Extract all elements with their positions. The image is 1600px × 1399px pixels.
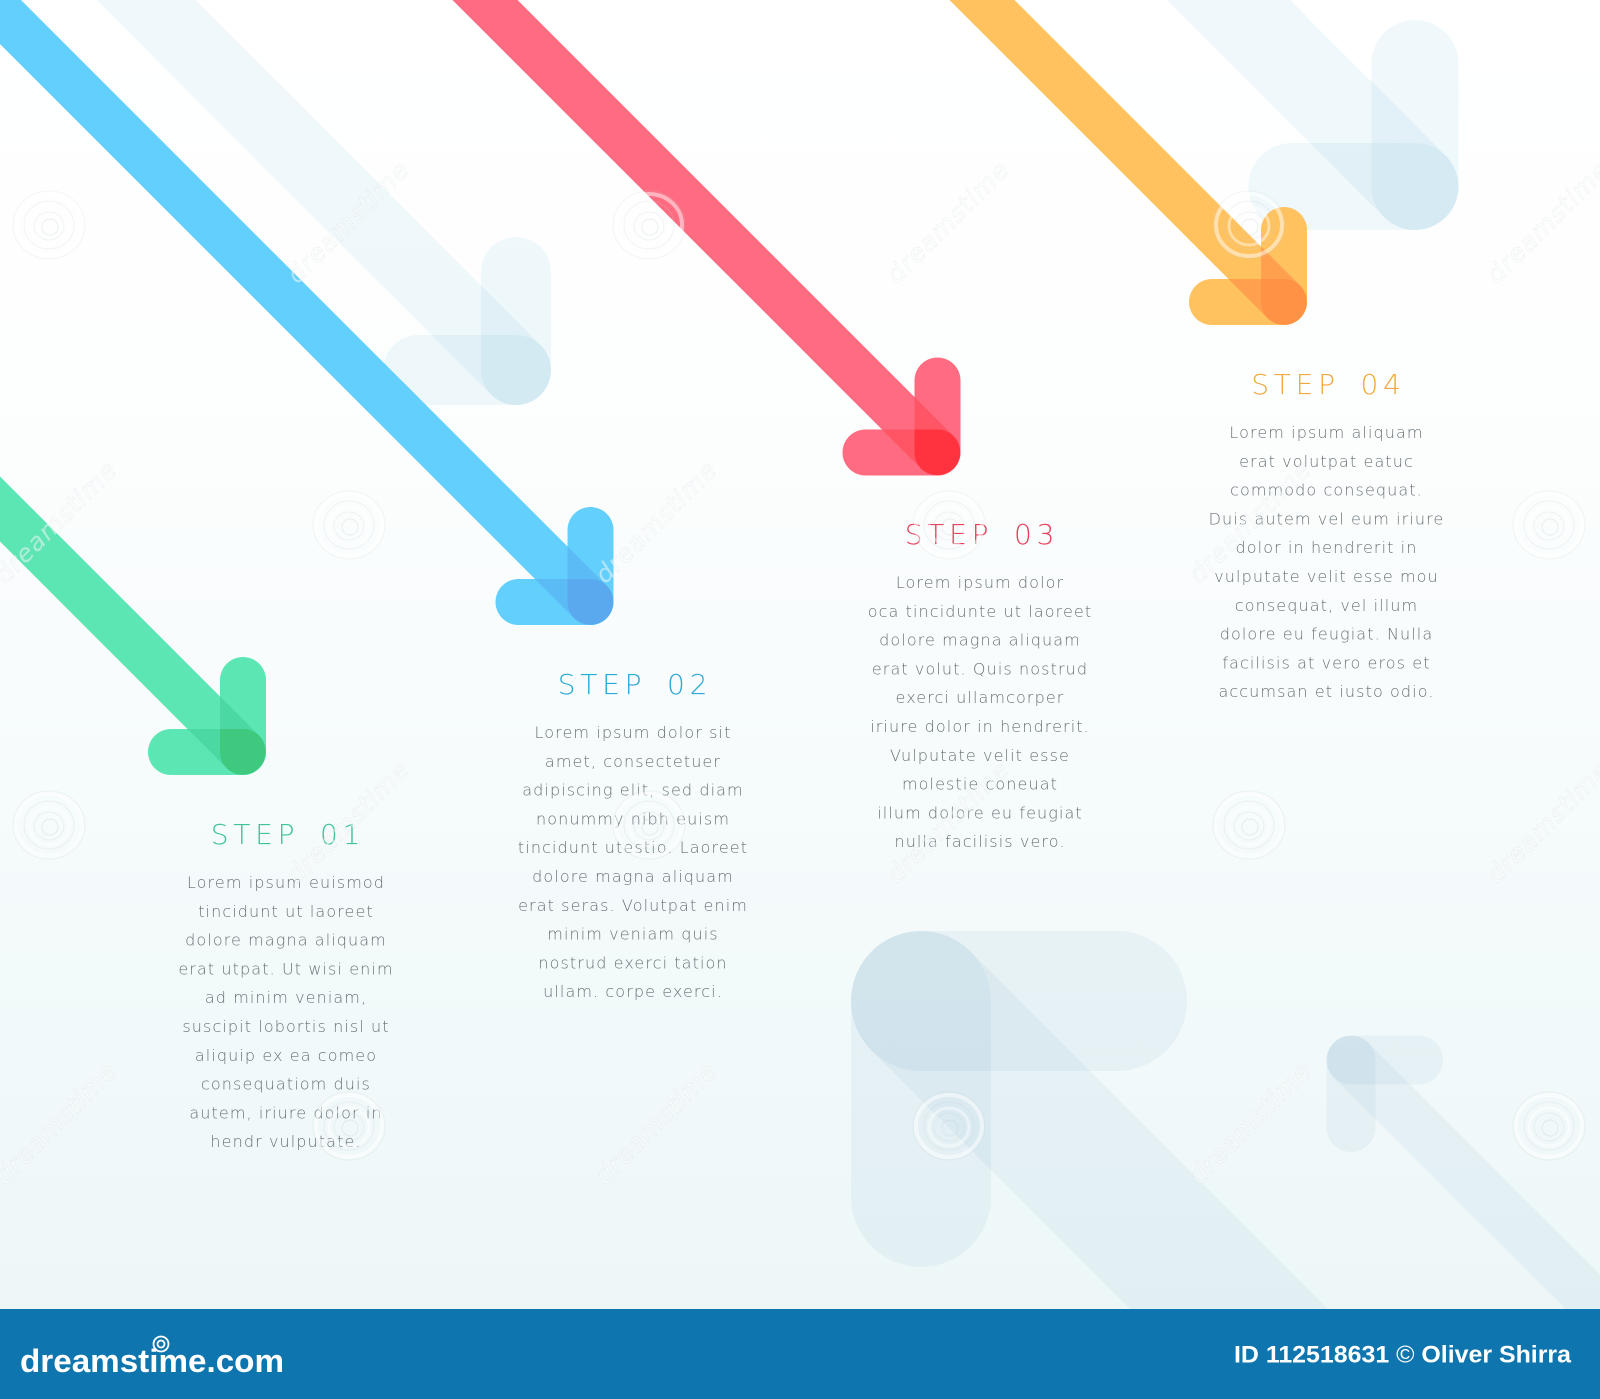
arrow: red step 03 [452,0,960,476]
pale arrow: top centre-left [91,0,551,405]
watermark: diagonal wordmarks: dreamstime [1183,1056,1317,1190]
text block: step 02: minim veniam quis [547,925,719,944]
text block: step 01: hendr vulputate. [210,1132,362,1151]
text block: step 01: suscipit lobortis nisl ut [182,1017,390,1036]
watermark: spirals [13,191,1585,1160]
text block: step 04 [1209,423,1444,701]
footer bar [0,1309,1600,1399]
text block: step 01: tincidunt ut laoreet [198,902,374,921]
text block: step 04: consequat, vel illum [1235,596,1418,615]
text block: step 03: exerci ullamcorper [896,688,1064,707]
heading: step 02: STEP 02 [558,668,712,701]
pale arrow: small bottom right [1326,1036,1600,1309]
text block: step 02: ullam. corpe exerci. [543,982,723,1001]
pale arrow: large bottom [851,931,1328,1309]
text block: step 03: iriure dolor in hendrerit. [870,717,1090,736]
text block: step 02: nostrud exerci tation [538,953,728,972]
text block: step 02 [518,723,748,1001]
watermark: diagonal wordmarks: dreamstime [881,755,1015,889]
text block: step 01: autem, iriure dolor in [189,1103,383,1122]
text block: step 01: aliquip ex ea comeo [195,1046,377,1065]
watermark: diagonal wordmarks: dreamstime [589,1056,723,1190]
text block: step 02: dolore magna aliquam [532,867,734,886]
text block: step 01 [178,873,394,1151]
text block: step 02: Lorem ipsum dolor sit [535,723,731,742]
watermark: diagonal wordmarks: dreamstime [589,455,723,589]
text block: step 03: molestie coneuat [902,775,1058,794]
text block: step 04: commodo consequat. [1230,481,1423,500]
text block: step 03: erat volut. Quis nostrud [872,659,1088,678]
text block: step 02: adipiscing elit, sed diam [522,781,744,800]
arrow: orange step 04 [950,0,1307,325]
footer logo text: dreamstime.com [20,1343,284,1379]
watermark: diagonal wordmarks: dreamstime [281,155,415,289]
text block: step 01: erat utpat. Ut wisi enim [178,959,394,978]
text block: step 03: dolore magna aliquam [879,631,1081,650]
text block: step 04: Duis autem vel eum iriure [1209,509,1444,528]
text block: step 02: nonummy nibh euism [536,809,730,828]
watermark: diagonal wordmarks: dreamstime [881,155,1015,289]
heading: step 04: STEP 04 [1251,368,1406,401]
text block: step 01: ad minim veniam, [205,988,367,1007]
text block: step 01: Lorem ipsum euismod [187,873,385,892]
heading: step 01: STEP 01 [211,818,365,851]
text block: step 03: Lorem ipsum dolor [896,573,1064,592]
text block: step 02: tincidunt utestio. Laoreet [518,838,748,857]
icon: logo spiral [154,1336,168,1352]
text block: step 04: dolor in hendrerit in [1236,538,1417,557]
text block: step 03: nulla facilisis vero. [894,832,1066,851]
text block: step 03: oca tincidunte ut laoreet [868,602,1092,621]
text block: step 04: dolore eu feugiat. Nulla [1220,625,1433,644]
text block: step 02: amet, consectetuer [545,752,721,771]
watermark: diagonal wordmarks [0,155,1600,1190]
text block: step 04: Lorem ipsum aliquam [1229,423,1424,442]
pale arrow: top right [1084,0,1458,230]
arrow: green step 01 [0,476,266,775]
text block: step 03 [868,573,1092,851]
watermark: diagonal wordmarks: dreamstime [1183,455,1317,589]
text block: step 04: vulputate velit esse mou [1214,567,1439,586]
text block: step 01: consequatiom duis [201,1075,371,1094]
text block: step 04: accumsan et iusto odio. [1218,682,1435,701]
heading: step 03: STEP 03 [905,518,1059,551]
text block: step 03: illum dolore eu feugiat [877,803,1083,822]
text block: step 02: erat seras. Volutpat enim [518,896,748,915]
watermark: diagonal wordmarks: dreamstime [281,755,415,889]
text block: step 04: erat volutpat eatuc [1239,452,1414,471]
text block: step 03: Vulputate velit esse [890,746,1070,765]
footer credit: ID 112518631 © Oliver Shirra [1234,1342,1572,1368]
arrow: blue step 02 [0,0,614,625]
text block: step 01: dolore magna aliquam [185,931,387,950]
text block: step 04: facilisis at vero eros et [1222,653,1431,672]
